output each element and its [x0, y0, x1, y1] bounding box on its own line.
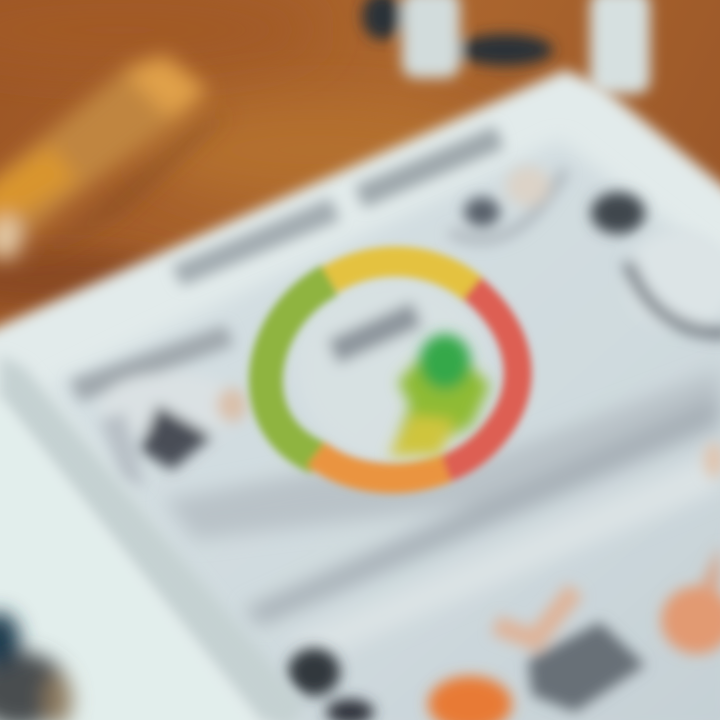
- gauge centre: [297, 276, 487, 460]
- ring: orange segment: [316, 454, 446, 478]
- gauge inner green shape: [388, 334, 490, 456]
- dark objects and white posts at top: [362, 0, 650, 94]
- icon: orange circle: [428, 676, 512, 720]
- left panel: title bar and icon: [70, 325, 247, 488]
- card edge: [0, 355, 305, 720]
- gauge ring: [266, 261, 518, 478]
- header bars: [172, 126, 504, 286]
- paper inner area: [50, 140, 720, 720]
- ring: yellow segment: [330, 261, 474, 290]
- top right icons: [450, 166, 720, 333]
- lower icons: [288, 442, 720, 720]
- orange object on table: [0, 55, 235, 265]
- white card in foreground: [0, 355, 305, 720]
- icon: peach strokes: [495, 590, 575, 640]
- icon: grey square: [528, 622, 645, 712]
- dark object bottom-left: [0, 612, 72, 720]
- icon: orange right shape: [661, 586, 720, 654]
- lower rows of paper: [165, 370, 720, 665]
- ring: red segment: [440, 288, 518, 470]
- icon: dark round: [288, 648, 340, 696]
- card face: [0, 400, 250, 720]
- ring: green segment: [266, 280, 330, 458]
